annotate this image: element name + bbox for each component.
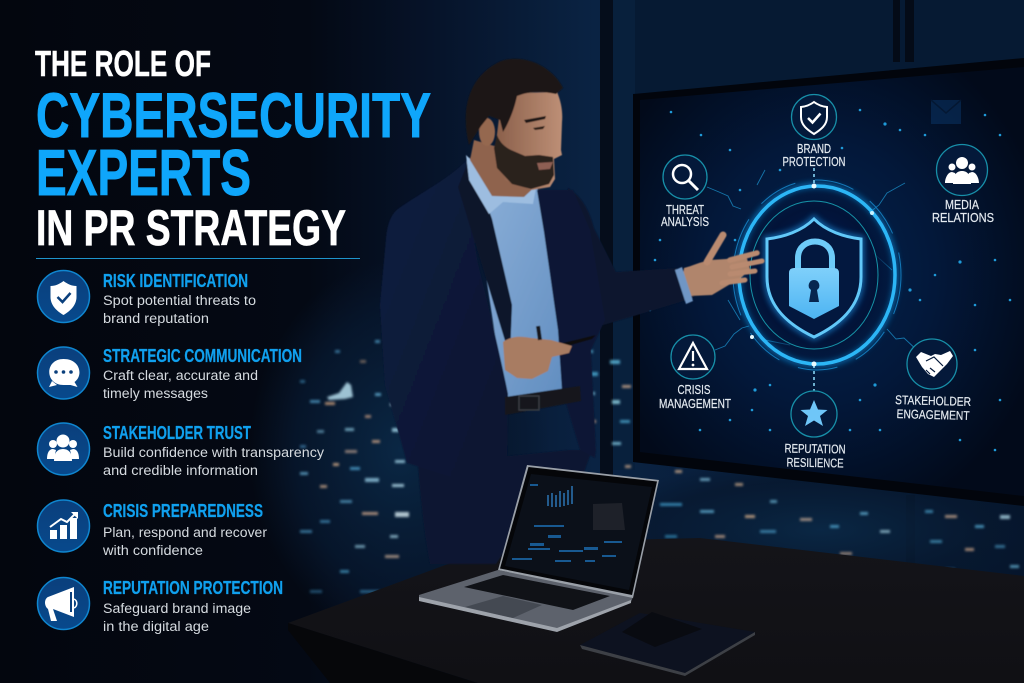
item: stakeholder trust [38, 423, 324, 478]
collar [466, 155, 537, 214]
item: strategic communication: Craft clear, accurate and [103, 368, 258, 383]
item: reputation protection [38, 578, 283, 634]
title: CYBERSECURITY [36, 81, 431, 151]
city lights through window [300, 340, 1019, 593]
belt [505, 386, 581, 415]
icon: shield check [38, 270, 90, 322]
item: stakeholder trust: STAKEHOLDER TRUST [103, 423, 251, 443]
shirt [470, 160, 573, 400]
item: reputation protection: in the digital age [103, 619, 209, 634]
cuff [675, 267, 693, 304]
eyebrow and eye [524, 116, 546, 130]
monitor frame [633, 58, 1024, 506]
item: stakeholder trust: Build confidence with transparency [103, 445, 324, 460]
title [35, 43, 431, 256]
monitor screen [640, 67, 1024, 496]
hair [466, 59, 563, 145]
holding hand [503, 337, 572, 379]
node: crisis management [659, 335, 731, 411]
pen [536, 326, 542, 340]
laptop bezel [500, 467, 657, 595]
icon: megaphone [38, 578, 90, 630]
node: media relations: MEDIA [945, 198, 980, 212]
item: risk identification: RISK IDENTIFICATION [103, 271, 248, 291]
monitor with cybersecurity diagram [633, 58, 1024, 506]
presenter [380, 59, 762, 564]
node: brand protection [782, 94, 846, 169]
laptop base [419, 570, 633, 630]
item: reputation protection: Safeguard brand image [103, 601, 251, 616]
item: crisis preparedness: with confidence [102, 543, 203, 558]
laptop lid [498, 465, 659, 598]
item: risk identification [38, 270, 256, 326]
icon: speech bubble [38, 347, 90, 399]
table [288, 538, 1024, 683]
node: stakeholder engagement: ENGAGEMENT [896, 407, 970, 423]
node: threat analysis: THREAT [666, 203, 704, 217]
laptop screen [505, 474, 652, 590]
item: risk identification: Spot potential threats to [103, 293, 256, 308]
jacket right panel [537, 190, 605, 458]
node: stakeholder engagement [895, 339, 971, 423]
lips [537, 162, 553, 170]
trousers [418, 450, 592, 564]
item: stakeholder trust: and credible information [103, 463, 258, 478]
face [495, 92, 562, 190]
pointing hand [683, 235, 762, 296]
keyboard [464, 575, 610, 610]
item: strategic communication: STRATEGIC COMMUNICATION [103, 346, 302, 366]
ear [479, 118, 495, 146]
faint mail icon [931, 100, 961, 124]
beard [494, 135, 554, 189]
node: threat analysis [661, 155, 709, 229]
icon: people group [38, 423, 90, 475]
icon: rising chart [38, 500, 90, 552]
title: IN PR STRATEGY [36, 200, 346, 256]
node: reputation resilience [784, 391, 846, 470]
title: EXPERTS [36, 136, 251, 209]
dashboard charts [512, 484, 625, 562]
node: stakeholder engagement: STAKEHOLDER [895, 393, 971, 409]
node: brand protection: PROTECTION [782, 155, 846, 169]
laptop [419, 465, 659, 632]
phone and pen [563, 335, 596, 347]
neck [470, 140, 540, 197]
node: reputation resilience: RESILIENCE [786, 456, 844, 470]
title: THE ROLE OF [35, 43, 211, 84]
item: strategic communication: timely messages [103, 386, 208, 401]
item: reputation protection: REPUTATION PROTECTION [103, 578, 283, 598]
item: crisis preparedness: CRISIS PREPAREDNESS [103, 501, 263, 521]
trackpad [465, 596, 542, 618]
list: five roles [38, 270, 324, 634]
node: reputation resilience: REPUTATION [784, 441, 846, 457]
item: crisis preparedness: Plan, respond and recover [103, 525, 268, 540]
node: media relations [932, 144, 994, 225]
central security ring [733, 168, 901, 403]
central shield with padlock [767, 219, 861, 337]
node: media relations: RELATIONS [932, 211, 994, 225]
node: crisis management: CRISIS [678, 383, 710, 397]
item: crisis preparedness [38, 500, 268, 558]
lapel shadow [458, 157, 512, 357]
pointing arm sleeve [552, 188, 694, 326]
item: risk identification: brand reputation [103, 311, 209, 326]
notebook and phone [580, 612, 755, 676]
jacket left [380, 157, 508, 482]
item: strategic communication [38, 346, 302, 401]
node: threat analysis: ANALYSIS [661, 215, 709, 229]
node: brand protection: BRAND [797, 142, 831, 156]
network dots and circuit lines [649, 109, 1011, 451]
node: crisis management: MANAGEMENT [659, 397, 731, 411]
